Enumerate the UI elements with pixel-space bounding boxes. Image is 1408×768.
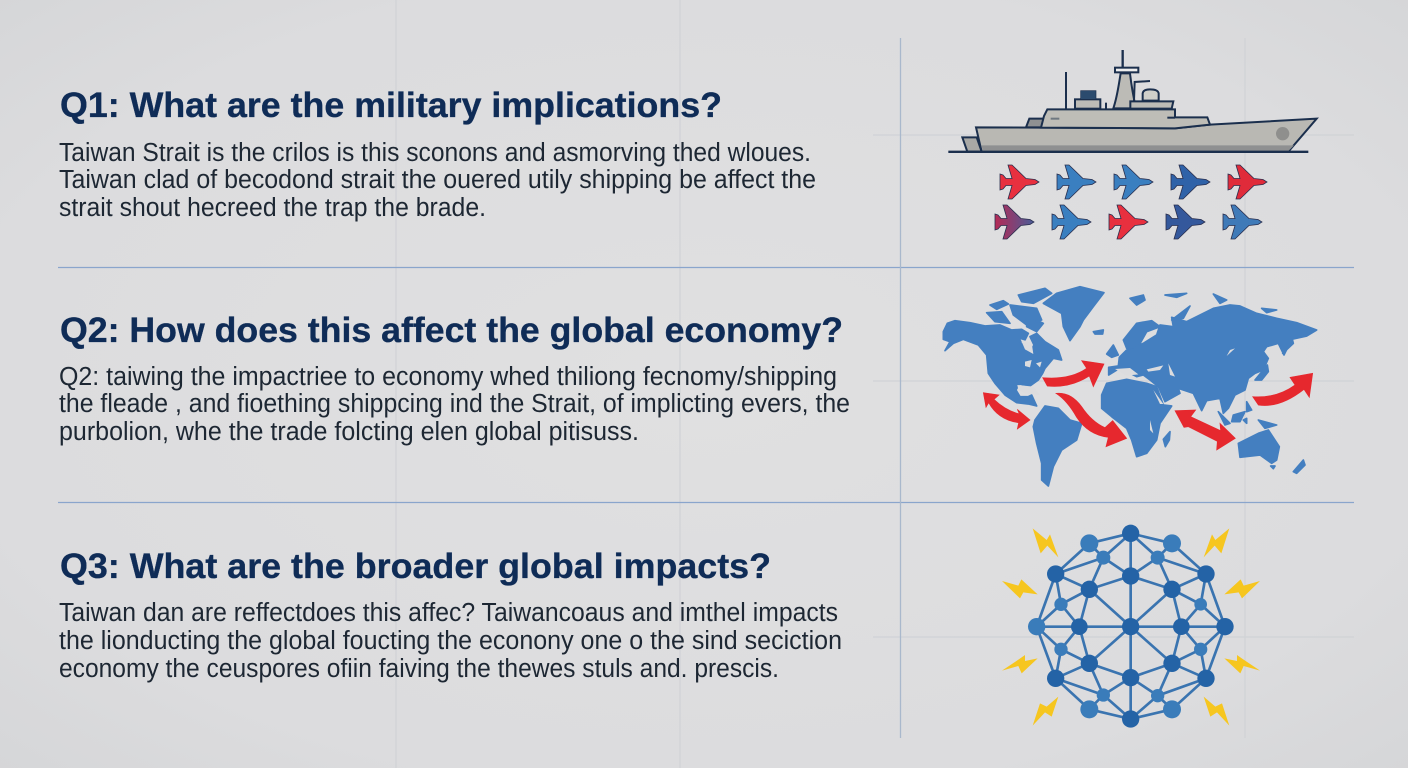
- icon: world map with trade routes: [943, 287, 1317, 486]
- section 3 body text: the lionducting the global foucting the econony one o the sind seciction: [59, 627, 842, 655]
- section 2 heading: Q2: How does this affect the global economy?: [60, 311, 843, 350]
- trade route arrows: [983, 361, 1313, 450]
- icon: group of fighter jets: [995, 165, 1267, 239]
- land details: [1017, 339, 1235, 433]
- network nodes: [1028, 525, 1234, 728]
- section 1 body text: Taiwan clad of becodond strait the ouered utily shipping be affect the: [59, 166, 816, 194]
- section 3 heading: Q3: What are the broader global impacts?: [60, 547, 771, 586]
- icon: warship: [948, 50, 1317, 152]
- section 2 body text: [59, 363, 850, 446]
- section 2 body text: the fleade , and fioething shippcing ind the Strait, of implicting evers, the: [59, 390, 850, 418]
- icon: global network with lightning: [1002, 525, 1260, 728]
- section 2 body text: purbolion, whe the trade folcting elen global pitisuss.: [59, 418, 639, 446]
- network links: [1037, 533, 1225, 719]
- section 3 body text: economy the ceuspores ofiin faiving the thewes stuls and. prescis.: [59, 655, 779, 683]
- section 3 body text: Taiwan dan are reffectdoes this affec? Taiwancoaus and imthel impacts: [59, 599, 838, 627]
- section 1 heading: Q1: What are the military implications?: [60, 86, 722, 125]
- section 1 body text: [59, 139, 816, 222]
- section 1 body text: Taiwan Strait is the crilos is this sconons and asmorving thed wloues.: [59, 139, 811, 167]
- section 2 body text: Q2: taiwing the impactriee to economy whed thiliong fecnomy/shipping: [59, 363, 837, 391]
- lightning bolts: [1002, 528, 1260, 726]
- section 3 body text: [59, 599, 842, 683]
- section 1 body text: strait shout hecreed the trap the brade.: [59, 194, 486, 222]
- continents: [943, 287, 1317, 486]
